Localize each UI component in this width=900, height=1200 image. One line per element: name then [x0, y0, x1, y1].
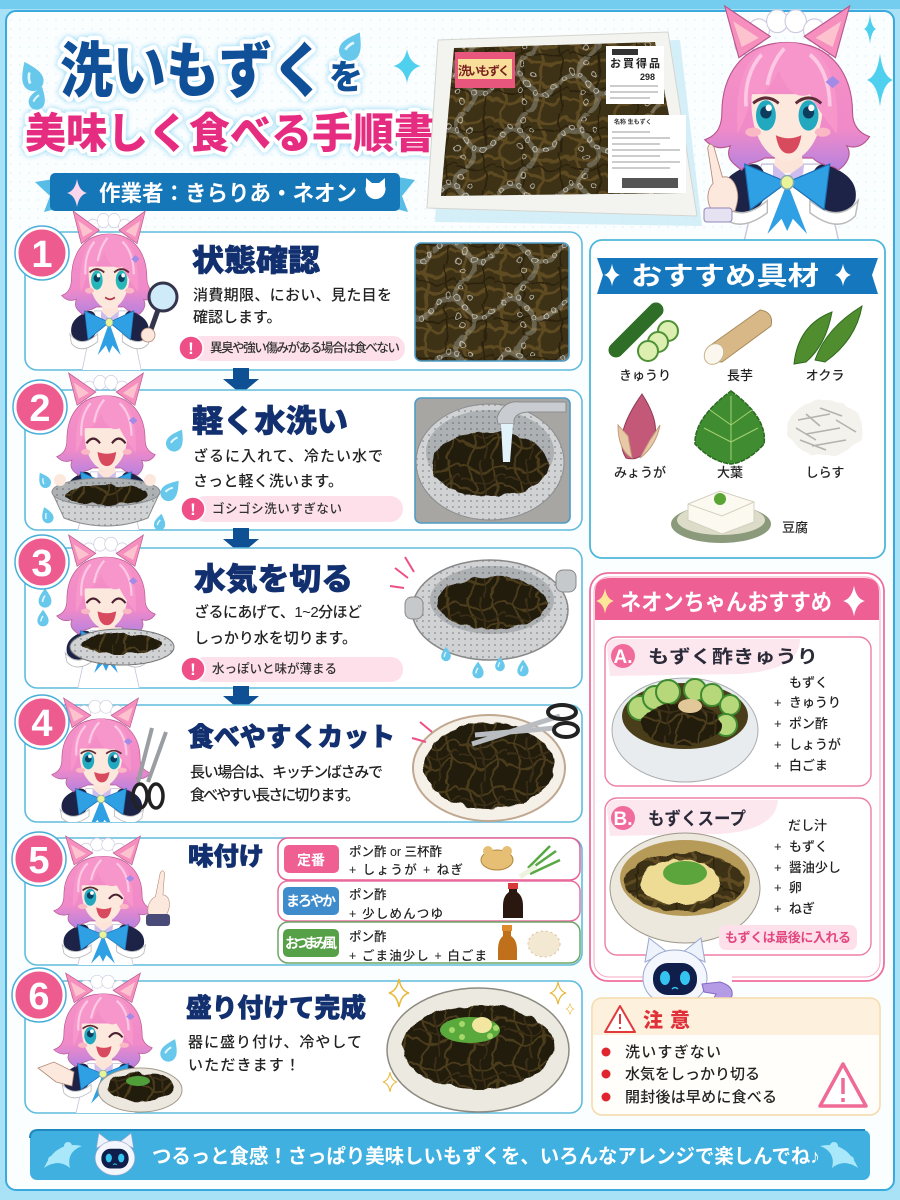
picks header: ネオンちゃんおすすめ: [620, 589, 832, 615]
description: さっと軽く洗います。: [193, 473, 343, 490]
seasoning: standard: 定番: [297, 852, 325, 868]
seasoning: mellow: + 少しめんつゆ: [349, 906, 443, 921]
panel 2: [25, 390, 582, 530]
author banner: [35, 173, 415, 212]
label: tofu: 豆腐: [782, 520, 808, 535]
product sticker: [455, 52, 515, 88]
number 5: [12, 832, 66, 886]
description: 食べやすい長さに切ります。: [190, 787, 360, 804]
badge A: [611, 644, 635, 668]
arrow 2: [223, 528, 259, 554]
character: main: [704, 4, 870, 240]
sparkles: [383, 979, 574, 1092]
price label: 298: [640, 72, 655, 82]
badge B: [611, 806, 635, 830]
description: いただきます！: [188, 1057, 300, 1074]
label: shirasu: しらす: [806, 465, 844, 480]
warning pill: [179, 336, 405, 361]
caution title: 注 意: [643, 1009, 690, 1032]
description: 消費期限、におい、見た目を: [193, 287, 392, 304]
character 1: [62, 211, 177, 374]
recipe A ingredients: + しょうが: [774, 737, 841, 752]
author banner: 作業者：きらりあ・ネオン: [99, 181, 357, 206]
price label: お買得品: [610, 56, 660, 70]
label: nagaimo: 長芋: [727, 368, 753, 383]
arrow 1: [223, 368, 259, 394]
finished bowl: [387, 988, 569, 1112]
seasoning: snack: [278, 922, 580, 963]
number 3: 3: [31, 543, 53, 585]
title: [15, 27, 435, 157]
panel: caution: [592, 998, 880, 1115]
description: [190, 764, 383, 804]
heading: 食べやすくカット: [188, 722, 395, 752]
character 2: [35, 373, 189, 534]
badge A: A.: [614, 647, 632, 668]
warning pill: 異臭や強い傷みがある場合は食べない: [210, 340, 400, 355]
recipe B ingredients: + 卵: [774, 880, 802, 895]
panel 5: [25, 838, 582, 965]
step 1: [15, 211, 582, 374]
warning pill: !: [190, 500, 196, 519]
recipe A ingredients: + ポン酢: [774, 716, 828, 731]
title line 2: 美味しく食べる手順書: [25, 110, 435, 157]
seasoning: mellow: まろやか: [286, 893, 336, 909]
panel 6: [25, 981, 582, 1113]
footer banner: [30, 1130, 870, 1180]
number 5: 5: [28, 840, 50, 882]
seasoning: mellow: [278, 881, 580, 921]
recipe B ingredients: + 醤油少し: [774, 860, 841, 875]
icon: cucumber: [616, 310, 678, 361]
icon: warning: [605, 1006, 635, 1032]
description: 長い場合は、キッチンばさみで: [190, 764, 383, 781]
number 2: 2: [29, 388, 51, 430]
caution list: 開封後は早めに食べる: [625, 1089, 777, 1106]
number 6: [12, 968, 66, 1022]
character 5: [53, 835, 170, 965]
icon: nagaimo: [700, 310, 772, 368]
description: [193, 287, 392, 326]
number 1: 1: [31, 234, 53, 276]
recipe A ingredients: もずく: [789, 675, 828, 690]
description: ざるにあげて、1~2分ほど: [194, 603, 362, 621]
number 3: [15, 535, 69, 589]
product sticker: 洗いもずく: [458, 63, 510, 78]
step 6: [12, 968, 582, 1121]
photo 2: [415, 398, 570, 523]
seasoning: mellow: ポン酢: [349, 887, 387, 902]
panel: Neon's picks: [590, 573, 884, 981]
mozuku tray photo: [427, 30, 702, 226]
character 4: [51, 697, 168, 822]
description: 器に盛り付け、冷やして: [188, 1034, 362, 1051]
description: ざるに入れて、冷たい水で: [193, 447, 383, 465]
description: 確認します。: [193, 309, 282, 326]
toppings header: [597, 258, 878, 294]
step 4: [14, 694, 583, 823]
panel 3: [25, 548, 582, 688]
seasoning: snack: + ごま油少し + 白ごま: [349, 948, 487, 963]
step 5: [12, 832, 582, 980]
recipe B ingredients: + ねぎ: [774, 901, 815, 916]
note pill: もずくは最後に入れる: [725, 930, 851, 945]
number 4: 4: [31, 703, 53, 745]
bowl B: [610, 833, 760, 943]
seasoning: standard: + しょうが + ねぎ: [349, 862, 463, 877]
icon: cat: [366, 178, 386, 199]
caution list: 洗いすぎない: [625, 1044, 721, 1061]
panel 4: [25, 705, 582, 822]
water splash: [44, 1142, 82, 1168]
number 6: 6: [28, 976, 50, 1018]
warning pill: !: [190, 660, 196, 679]
number 1: [15, 226, 69, 280]
panel 1: [25, 232, 582, 370]
panel: recommended toppings: [590, 240, 885, 558]
warning pill: !: [188, 339, 194, 358]
heading: 水気を切る: [194, 562, 353, 597]
seasoning: snack: ポン酢: [349, 929, 387, 944]
badge B: B.: [614, 809, 632, 830]
seasoning: standard: ポン酢 or 三杯酢: [349, 844, 443, 859]
title line 1: 洗いもずく: [60, 38, 325, 105]
recipe B ingredients: + もずく: [774, 839, 828, 854]
water drops: [15, 27, 369, 112]
heading: 味付け: [188, 843, 264, 871]
number 4: [15, 695, 69, 749]
water splash right: [820, 1142, 858, 1168]
warning pill: ゴシゴシ洗いすぎない: [212, 501, 342, 516]
recipe B ingredients: だし汁: [788, 818, 827, 833]
bowl A: [612, 678, 758, 782]
seasoning: standard: [278, 838, 580, 880]
label: myoga: みょうが: [614, 465, 666, 480]
title を: を: [329, 59, 363, 97]
icon: shiso leaf: [695, 391, 764, 464]
icon: myoga: [618, 394, 660, 459]
sparkle: [393, 49, 421, 83]
recipe B: [605, 798, 871, 955]
label: cucumber: きゅうり: [619, 368, 671, 383]
note pill: [719, 925, 857, 950]
footer text: つるっと食感！さっぱり美味しいもずくを、いろんなアレンジで楽しんでね♪: [152, 1144, 820, 1168]
ingredient label: 名称 生もずく: [614, 118, 652, 126]
recipe A title: もずく酢きゅうり: [648, 646, 818, 667]
icon: tofu: [671, 491, 771, 543]
description: しっかり水を切ります。: [194, 630, 357, 647]
label: okra: オクラ: [806, 368, 844, 383]
caution list: [602, 1044, 777, 1106]
recipe A ingredients: + きゅうり: [774, 695, 841, 710]
label: shiso: 大葉: [717, 465, 743, 480]
arrow 3: [223, 686, 259, 711]
recipe B title: もずくスープ: [648, 809, 746, 829]
price label: [606, 46, 664, 104]
description: [193, 447, 383, 490]
recipe B ingredients: [774, 818, 841, 916]
seasoning: snack: おつまみ風: [285, 935, 337, 951]
robot icon: [95, 1133, 135, 1175]
character 3: [37, 535, 174, 691]
caution list: 水気をしっかり切る: [625, 1066, 760, 1083]
warning pill: [181, 496, 403, 522]
colander photo: [390, 557, 576, 678]
recipe A: [605, 637, 871, 786]
number 2: [13, 380, 67, 434]
icon: shirasu: [787, 400, 863, 456]
icon: okra: [794, 306, 862, 364]
step 2: [13, 373, 582, 534]
character 6: [38, 973, 182, 1121]
photo 1: [414, 242, 570, 362]
mascot robot: [643, 938, 732, 1006]
sparkles: [864, 14, 893, 107]
recipe A ingredients: + 白ごま: [774, 758, 828, 773]
description: [194, 603, 362, 647]
plate with cut mozuku: [413, 715, 565, 821]
ingredient label: [608, 115, 686, 193]
heading: 軽く水洗い: [192, 404, 348, 439]
picks header: [595, 578, 879, 620]
description: [188, 1034, 362, 1074]
toppings header: おすすめ具材: [631, 261, 819, 291]
warning pill: [181, 657, 403, 682]
recipe A ingredients: [774, 675, 841, 773]
scissors: [412, 705, 578, 744]
step 3: [15, 535, 582, 691]
icon: big warning: [820, 1064, 866, 1106]
heading: 盛り付けて完成: [186, 993, 366, 1023]
heading: 状態確認: [192, 245, 320, 278]
warning pill: 水っぽいと味が薄まる: [212, 661, 337, 676]
